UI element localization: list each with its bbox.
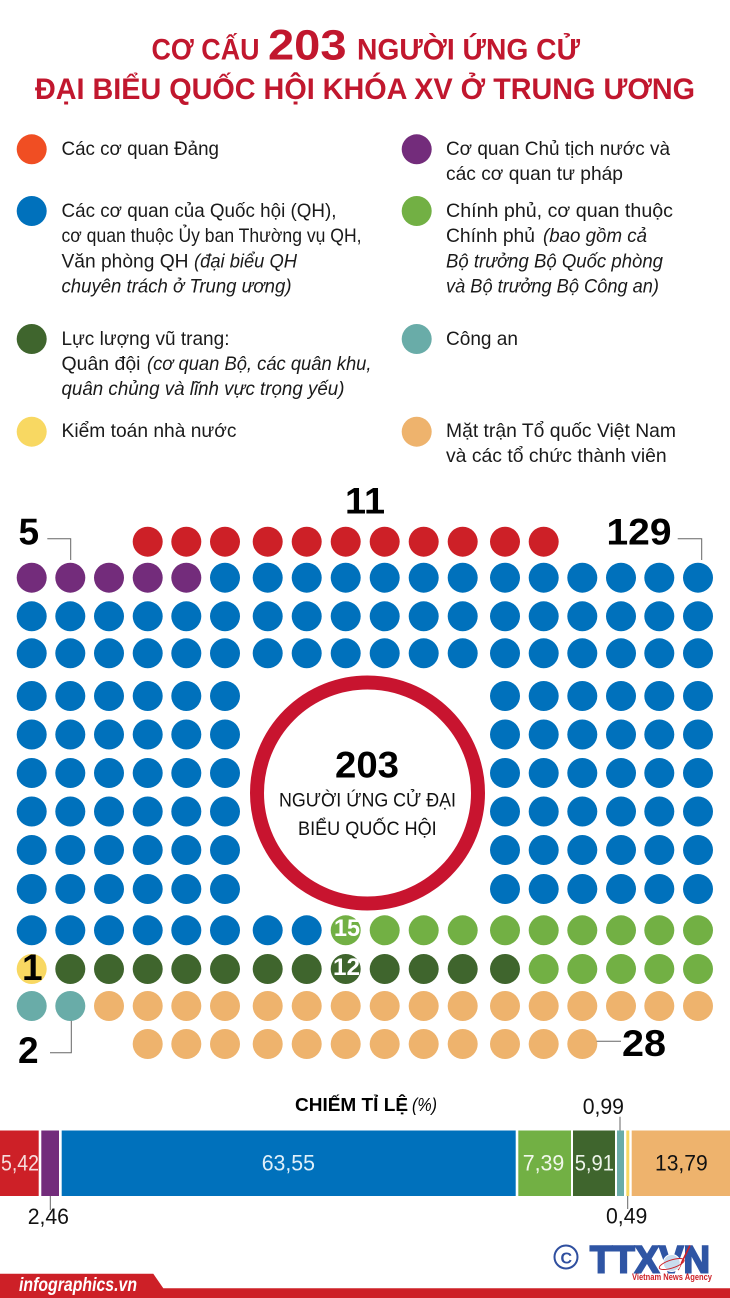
segment: party 5,42: 5,42 bbox=[1, 1150, 39, 1176]
count label: 129 with leader bbox=[606, 512, 702, 560]
segment: armed forces 5,91 bbox=[573, 1130, 615, 1196]
legend item: government: Chính phủ bbox=[446, 225, 535, 247]
title: ĐẠI BIỂU QUỐC HỘI KHÓA XV Ở TRUNG ƯƠNG bbox=[35, 72, 695, 106]
count label: 28 with leader bbox=[597, 1023, 666, 1064]
legend item: government: và Bộ trưởng Bộ Công an) bbox=[446, 276, 659, 298]
purple dots: 5 bbox=[17, 563, 201, 593]
footer band bbox=[0, 1274, 730, 1298]
dark green dots: 12 bbox=[55, 954, 520, 984]
segment: government 7,39 bbox=[518, 1130, 571, 1196]
title: 203 bbox=[268, 22, 346, 70]
logo: TTXVN: TTXVN bbox=[590, 1240, 710, 1282]
segment: audit 0,49: 0,49 bbox=[606, 1204, 647, 1228]
yellow dot: 1 bbox=[17, 954, 47, 984]
icon: copyright bbox=[554, 1246, 578, 1268]
count label: 5 with leader bbox=[18, 512, 71, 560]
share chart heading: (%) bbox=[412, 1095, 437, 1115]
count label: 2 with leader bbox=[18, 1021, 71, 1071]
legend item: president office and judiciary: các cơ quan tư pháp bbox=[446, 163, 623, 185]
legend item: government: Chính phủ, cơ quan thuộc bbox=[446, 200, 673, 222]
count label: 5 with leader: 5 bbox=[18, 512, 39, 552]
legend item: National Assembly: Văn phòng QH bbox=[62, 250, 188, 272]
segment: armed forces 5,91: 5,91 bbox=[575, 1150, 614, 1176]
legend item: police bbox=[402, 324, 518, 354]
center circle: BIỂU QUỐC HỘI bbox=[298, 816, 437, 840]
orange dots: 28 bbox=[94, 991, 713, 1059]
legend item: National Assembly: chuyên trách ở Trung ương) bbox=[62, 276, 292, 298]
legend item: National Assembly: (đại biểu QH bbox=[194, 250, 298, 272]
count label: 2 with leader: 2 bbox=[18, 1030, 39, 1071]
legend item: armed forces: Quân đội bbox=[62, 353, 140, 375]
legend item: National Assembly: Các cơ quan của Quốc hội (QH), bbox=[62, 200, 336, 222]
segment: fatherland front 13,79 bbox=[632, 1130, 730, 1196]
share chart heading: CHIẾM TỈ LỆ bbox=[295, 1094, 408, 1115]
segment: audit 0,49 bbox=[606, 1130, 647, 1228]
segment: government 7,39: 7,39 bbox=[523, 1150, 564, 1176]
title bbox=[35, 22, 695, 106]
count label: 129 with leader: 129 bbox=[606, 512, 672, 552]
legend item: government: (bao gồm cả bbox=[543, 225, 647, 247]
legend item: National Assembly bbox=[17, 196, 361, 298]
blue dots: 129 bbox=[17, 563, 713, 945]
count label: 15: 15 bbox=[334, 915, 360, 942]
segment: president and judiciary 2,46 bbox=[28, 1130, 69, 1229]
count label: 1: 1 bbox=[22, 947, 43, 988]
legend bbox=[17, 134, 676, 467]
dot matrix chart bbox=[17, 480, 713, 1071]
segment: president and judiciary 2,46: 2,46 bbox=[28, 1204, 69, 1229]
legend item: party agencies bbox=[17, 134, 219, 164]
segment: national assembly 63,55 bbox=[62, 1130, 516, 1196]
segment: police 0,99: 0,99 bbox=[583, 1094, 624, 1119]
segment: police 0,99 bbox=[583, 1094, 624, 1196]
legend item: armed forces: quân chủng và lĩnh vực trọng yếu) bbox=[62, 378, 344, 400]
title: CƠ CẤU bbox=[152, 32, 260, 66]
red dots: 11 bbox=[133, 527, 559, 557]
legend item: government: Bộ trưởng Bộ Quốc phòng bbox=[446, 250, 663, 272]
green dots: 15 bbox=[331, 915, 713, 984]
center circle bbox=[257, 682, 478, 904]
legend item: government bbox=[402, 196, 673, 298]
stacked percentage bar bbox=[0, 1094, 730, 1229]
legend item: fatherland front bbox=[402, 417, 676, 467]
center circle: 203 bbox=[335, 744, 399, 786]
icon: globe bbox=[658, 1246, 690, 1272]
legend item: armed forces: (cơ quan Bộ, các quân khu, bbox=[147, 353, 372, 375]
segment: fatherland front 13,79: 13,79 bbox=[655, 1150, 708, 1176]
segment: national assembly 63,55: 63,55 bbox=[262, 1150, 315, 1176]
legend item: armed forces bbox=[17, 324, 371, 400]
legend item: state audit bbox=[17, 417, 237, 447]
legend item: state audit: Kiểm toán nhà nước bbox=[62, 420, 237, 442]
legend item: president office and judiciary: Cơ quan Chủ tịch nước và bbox=[446, 138, 670, 160]
count label: 12: 12 bbox=[333, 954, 360, 981]
legend item: fatherland front: và các tổ chức thành viên bbox=[446, 445, 667, 467]
logo: TTXVN: Vietnam News Agency bbox=[632, 1272, 712, 1282]
segment: party 5,42 bbox=[0, 1130, 39, 1196]
legend item: armed forces: Lực lượng vũ trang: bbox=[62, 328, 230, 350]
legend item: president office and judiciary bbox=[402, 134, 670, 185]
icon: copyright: C bbox=[560, 1250, 572, 1268]
count label: 11: 11 bbox=[345, 480, 385, 522]
legend item: National Assembly: cơ quan thuộc Ủy ban Thường vụ QH, bbox=[62, 223, 362, 247]
legend item: party agencies: Các cơ quan Đảng bbox=[62, 138, 219, 160]
teal dots: 2 bbox=[17, 991, 85, 1021]
center circle: NGƯỜI ỨNG CỬ ĐẠI bbox=[279, 788, 456, 812]
count label: 28 with leader: 28 bbox=[622, 1023, 666, 1064]
footer band: infographics.vn bbox=[19, 1275, 137, 1296]
title: NGƯỜI ỨNG CỬ bbox=[357, 32, 580, 66]
legend item: police: Công an bbox=[446, 328, 518, 350]
legend item: fatherland front: Mặt trận Tổ quốc Việt Nam bbox=[446, 420, 676, 442]
